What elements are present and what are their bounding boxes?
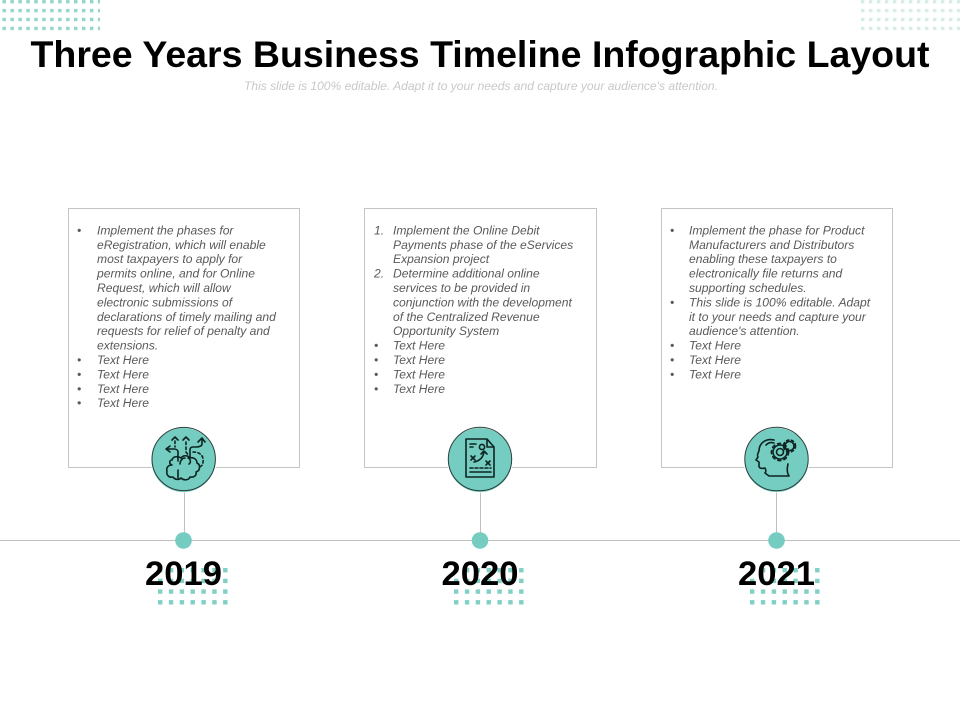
numbered list 2020: 2. xyxy=(373,267,384,281)
decorative dots: top left xyxy=(0,0,100,32)
connector 2021 xyxy=(776,490,777,534)
year 2020: 2020 xyxy=(442,555,518,593)
timeline node 2020 xyxy=(472,532,488,549)
connector 2019 xyxy=(184,490,185,534)
numbered list 2020: conjunction with the development xyxy=(393,295,572,309)
bullet list 2019: Implement the phases for xyxy=(97,223,234,237)
numbered list 2020: Text Here xyxy=(393,353,445,367)
bullet list 2021 xyxy=(670,223,871,381)
bullet list 2021: Text Here xyxy=(689,339,741,353)
text box 2019 xyxy=(68,208,300,468)
bullet list 2021: supporting schedules. xyxy=(689,281,807,295)
bullet list 2021: • xyxy=(670,353,674,367)
bullet list 2019: extensions. xyxy=(97,339,158,353)
text box 2021 xyxy=(662,208,892,468)
bullet list 2019 xyxy=(77,223,277,410)
bullet list 2019: • xyxy=(77,223,81,237)
bullet list 2021: • xyxy=(670,339,674,353)
numbered list 2020: of the Centralized Revenue xyxy=(393,310,540,324)
bullet list 2019: Request, which will allow xyxy=(97,281,232,295)
timeline node 2021 xyxy=(768,532,785,549)
bullet list 2021: enabling these taxpayers to xyxy=(689,252,837,266)
title: Three Years Business Timeline Infographic Layout xyxy=(30,34,930,75)
numbered list 2020: Payments phase of the eServices xyxy=(393,238,573,252)
bullet list 2019: most taxpayers to apply for xyxy=(97,252,243,266)
numbered list 2020: Determine additional online xyxy=(393,267,540,281)
bullet list 2021: Text Here xyxy=(689,367,741,381)
bullet list 2019: Text Here xyxy=(97,382,149,396)
numbered list 2020: • xyxy=(374,339,378,353)
numbered list 2020: • xyxy=(374,382,378,396)
numbered list 2020: • xyxy=(374,367,378,381)
bullet list 2021: This slide is 100% editable. Adapt xyxy=(689,295,871,309)
bullet list 2019: electronic submissions of xyxy=(97,295,234,309)
bullet list 2019: requests for relief of penalty and xyxy=(97,324,271,338)
bullet list 2021: • xyxy=(670,295,674,309)
bullet list 2021: audience's attention. xyxy=(689,324,800,338)
year 2019 xyxy=(145,555,229,605)
icon badge 2019: brain with arrows xyxy=(150,426,216,492)
numbered list 2020: services to be provided in xyxy=(393,281,530,295)
panel: 2019 xyxy=(68,208,300,605)
bullet list 2019: Text Here xyxy=(97,353,149,367)
numbered list 2020: 1. xyxy=(374,223,384,237)
year 2021: 2021 xyxy=(738,555,815,593)
bullet list 2021: it to your needs and capture your xyxy=(689,310,867,324)
icon badge 2021: head with gears xyxy=(744,426,810,492)
icon badge 2020: strategy document xyxy=(447,426,513,492)
bullet list 2019: Text Here xyxy=(97,367,149,381)
bullet list 2021: Text Here xyxy=(689,353,741,367)
subtitle: This slide is 100% editable. Adapt it to your needs and capture your audience's attention. xyxy=(244,79,718,93)
numbered list 2020 xyxy=(373,223,573,396)
bullet list 2021: Implement the phase for Product xyxy=(689,223,865,237)
numbered list 2020: Text Here xyxy=(393,382,445,396)
numbered list 2020: Text Here xyxy=(393,339,445,353)
bullet list 2019: declarations of timely mailing and xyxy=(97,310,277,324)
panel: 2020 xyxy=(364,208,596,605)
numbered list 2020: Text Here xyxy=(393,367,445,381)
bullet list 2021: • xyxy=(670,223,674,237)
bullet list 2019: • xyxy=(77,353,81,367)
bullet list 2019: eRegistration, which will enable xyxy=(97,238,266,252)
timeline line xyxy=(0,540,960,541)
decorative dots: top right xyxy=(861,0,960,32)
bullet list 2019: • xyxy=(77,382,81,396)
numbered list 2020: Expansion project xyxy=(393,252,490,266)
bullet list 2019: permits online, and for Online xyxy=(96,267,255,281)
panel: 2021 xyxy=(662,208,892,605)
bullet list 2021: Manufacturers and Distributors xyxy=(689,238,854,252)
connector 2020 xyxy=(480,490,481,534)
timeline node 2019 xyxy=(175,532,192,549)
bullet list 2021: • xyxy=(670,367,674,381)
bullet list 2021: electronically file returns and xyxy=(689,267,844,281)
numbered list 2020: • xyxy=(374,353,378,367)
bullet list 2019: • xyxy=(77,396,81,410)
bullet list 2019: • xyxy=(77,367,81,381)
numbered list 2020: Implement the Online Debit xyxy=(393,223,540,237)
text box 2020 xyxy=(364,208,596,468)
numbered list 2020: Opportunity System xyxy=(393,324,499,338)
year 2019: 2019 xyxy=(145,555,222,593)
bullet list 2019: Text Here xyxy=(97,396,149,410)
